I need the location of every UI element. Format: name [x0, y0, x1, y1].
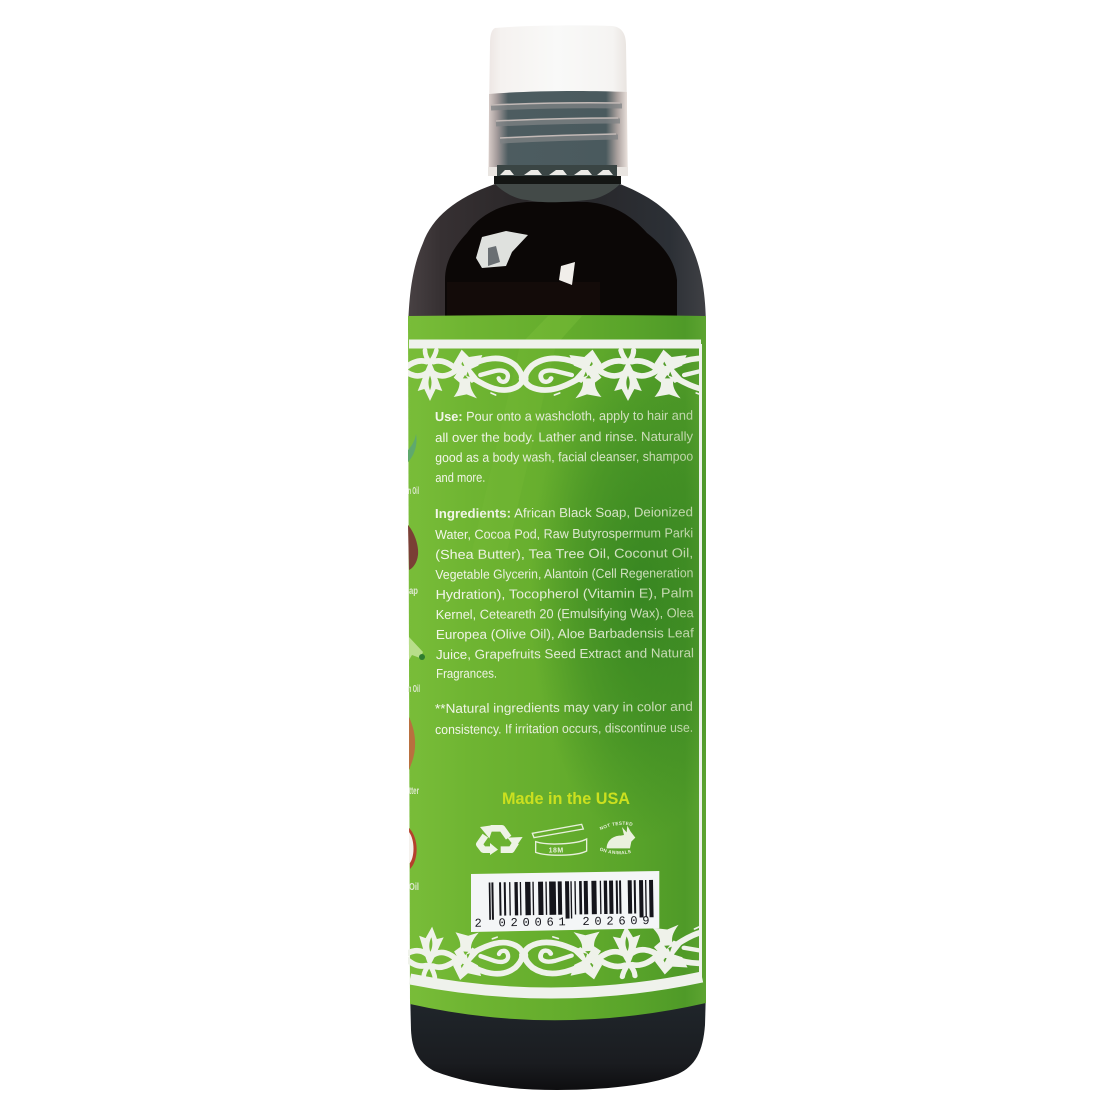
- bottle shoulder: [408, 176, 706, 330]
- text block: use directions: all over the body. Lather and rinse. Naturally: [435, 429, 694, 445]
- text block: ingredients: Ingredients: African Black Soap, Deionized: [435, 504, 693, 521]
- label: green wrap: [408, 315, 706, 1020]
- cap inner threaded neck: [489, 91, 627, 167]
- cut-off side ingredient icons: [408, 434, 425, 893]
- dark glossy liquid reflection: [445, 202, 677, 330]
- text block: disclaimer: **Natural ingredients may vary in color and: [435, 699, 693, 716]
- icon: not tested on animals rabbit: [600, 822, 636, 854]
- side label fragments: n Oil: [408, 684, 420, 695]
- text block: disclaimer: consistency. If irritation occurs, discontinue use.: [435, 720, 693, 737]
- highlight reflection small: [559, 262, 575, 285]
- text block: use directions: and more.: [435, 470, 485, 485]
- side label fragments: [408, 486, 420, 893]
- bottom ornament band: [408, 924, 699, 980]
- bottle base: [410, 990, 706, 1090]
- icon: 18 month open jar: [532, 824, 587, 855]
- text block: ingredients: Hydration), Tocopherol (Vitamin E), Palm: [435, 585, 694, 602]
- barcode digits: 2 020061 202609: [475, 914, 650, 931]
- cap: [488, 25, 628, 176]
- text block: disclaimer: [435, 699, 693, 737]
- icon: recycling symbol: [479, 825, 523, 855]
- top ornament band: [408, 348, 699, 401]
- product photo: bottle back view: [408, 26, 706, 1090]
- text block: ingredients: Water, Cocoa Pod, Raw Butyrospermum Parki: [435, 525, 693, 542]
- text block: ingredients: [435, 504, 695, 681]
- text block: use directions: Use: Pour onto a washcloth, apply to hair and: [435, 408, 693, 424]
- text block: ingredients: Juice, Grapefruits Seed Extract and Natural: [436, 645, 694, 662]
- side label fragments: n Oil: [408, 486, 419, 497]
- bottle neck collar: [495, 184, 620, 202]
- icon: aloe leaves: [409, 637, 425, 660]
- icon: 18 month open jar: 18M: [549, 848, 564, 855]
- text block: ingredients: Fragrances.: [436, 666, 497, 681]
- text block: ingredients: (Shea Butter), Tea Tree Oil, Coconut Oil,: [435, 545, 693, 562]
- cap rim teeth: [488, 165, 628, 176]
- text block: ingredients: Vegetable Glycerin, Alantoin (Cell Regeneration: [435, 565, 693, 582]
- highlight reflection large: [476, 231, 528, 268]
- barcode bars: [489, 880, 654, 920]
- heading: made in the USA: Made in the USA: [502, 790, 630, 808]
- side label fragments: ap: [409, 586, 418, 597]
- icon: shea nut: [409, 717, 415, 770]
- side label fragments: tter: [409, 786, 419, 797]
- icon: cocoa pod: [408, 525, 418, 570]
- text block: ingredients: Europea (Olive Oil), Aloe Barbadensis Leaf: [436, 625, 694, 642]
- label frame: [409, 344, 702, 993]
- text block: ingredients: Kernel, Ceteareth 20 (Emulsifying Wax), Olea: [436, 605, 694, 622]
- icon: coconut: [409, 828, 417, 869]
- side label fragments: Oil: [409, 882, 419, 893]
- barcode: [471, 871, 659, 932]
- icon: tea tree leaf: [408, 434, 417, 462]
- icon: not tested on animals rabbit: ON ANIMALS: [600, 848, 631, 854]
- text block: use directions: good as a body wash, facial cleanser, shampoo: [435, 449, 693, 465]
- icon: not tested on animals rabbit: NOT TESTED: [600, 822, 632, 830]
- text block: use directions: [435, 408, 694, 485]
